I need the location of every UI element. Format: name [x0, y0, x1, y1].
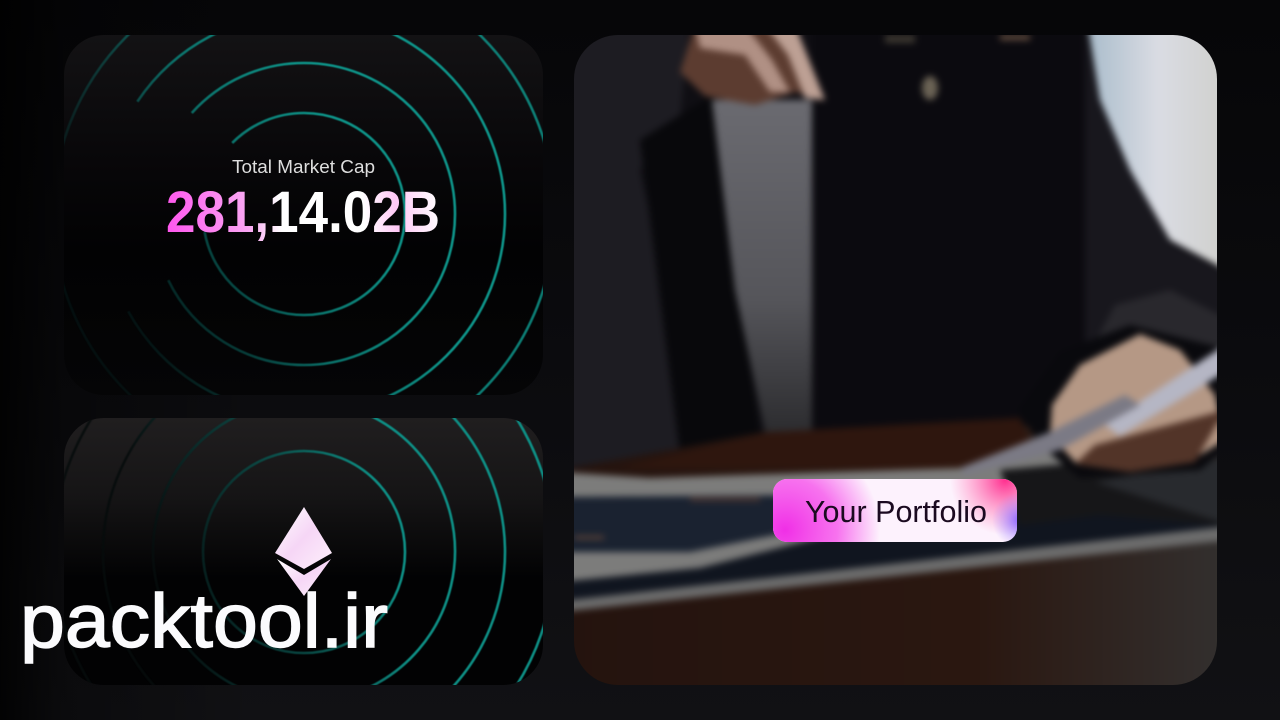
- photo scene: [560, 20, 1230, 700]
- panel: total market cap: [64, 35, 543, 395]
- badge: Your Portfolio: Your Portfolio: [805, 494, 987, 529]
- badge: Your Portfolio: [773, 479, 1017, 542]
- value: 281,14.02B: 281,14.02B: [166, 180, 440, 245]
- panel: ethereum: [64, 418, 543, 685]
- label: Total Market Cap: Total Market Cap: [232, 157, 375, 177]
- concentric teal rings: [64, 418, 543, 685]
- watermark: packtool.ir: packtool.ir: [20, 579, 388, 664]
- concentric teal rings: [64, 35, 543, 395]
- icon: ethereum diamond: [275, 507, 332, 596]
- panel: photo of person reviewing documents: [560, 20, 1230, 700]
